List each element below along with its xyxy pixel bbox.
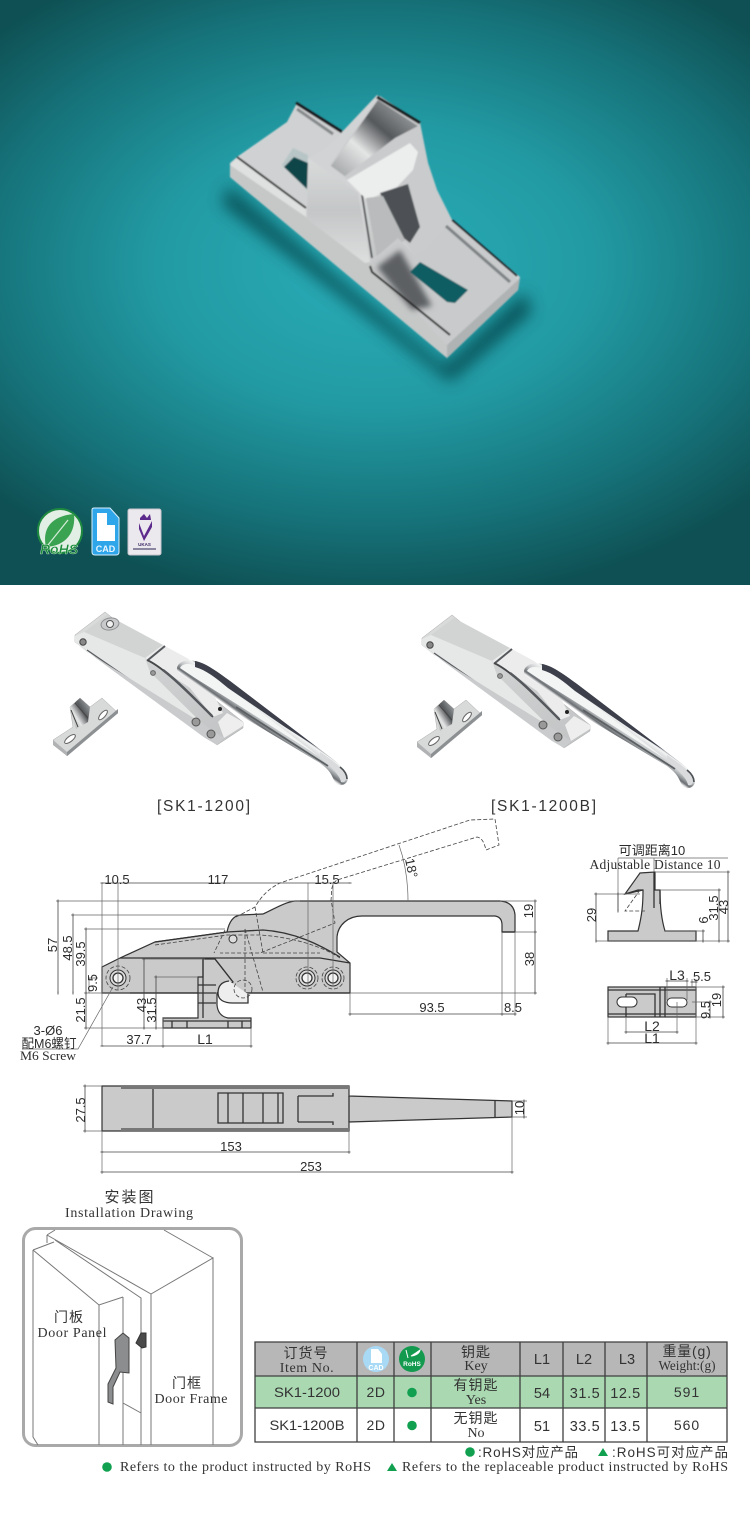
table header: L3 (619, 1352, 635, 1368)
head and neck (330, 96, 452, 255)
technical drawing: top view (73, 1086, 527, 1174)
open position dashed handle (214, 819, 499, 994)
technical drawing: catch side view: 6 (696, 916, 711, 924)
dimension numbers: L1 (197, 1031, 213, 1047)
label: door frame: 门框 (172, 1375, 202, 1391)
table header (280, 1343, 716, 1376)
heading: installation drawing (65, 1189, 193, 1221)
label: door panel: 门板 (54, 1309, 84, 1325)
installation diagram panel (24, 1228, 242, 1446)
table row: SK1-1200B: SK1-1200B (270, 1417, 344, 1433)
technical drawing: catch plan view: L1 (644, 1030, 660, 1046)
technical drawing: top view: 27.5 (73, 1097, 88, 1123)
label: door frame (154, 1375, 228, 1407)
specification table (255, 1342, 727, 1442)
product photo: SK1-1200 (75, 612, 348, 785)
technical drawing: catch side view: 43 (716, 900, 731, 914)
table header: 订货号 (284, 1345, 328, 1361)
certification icons (38, 508, 161, 557)
table header: L2 (576, 1352, 592, 1368)
front side face (230, 165, 447, 358)
table row: SK1-1200: 54 (534, 1386, 550, 1402)
table row: SK1-1200: 591 (674, 1384, 700, 1400)
dimension numbers: 18° (402, 857, 421, 879)
adjustable distance note (590, 843, 721, 872)
screw callout: 3-Ø6 (34, 1023, 62, 1038)
table header: L1 (534, 1352, 550, 1368)
technical drawing: catch plan view: L2 (644, 1018, 660, 1034)
product label: [SK1-1200B] (491, 798, 596, 815)
table row: SK1-1200B: 51 (534, 1419, 550, 1435)
table row: SK1-1200: Yes (466, 1393, 486, 1408)
technical drawing: catch plan view: 5.5 (693, 969, 711, 984)
technical drawing: catch side view (584, 843, 731, 941)
dimension numbers: 10.5 (104, 872, 130, 887)
dimension numbers: 31.5 (144, 997, 159, 1023)
dimension numbers: 19 (521, 904, 536, 918)
right base plate (370, 222, 518, 345)
product label: [SK1-1200] (157, 798, 250, 815)
technical drawing: top view: 153 (220, 1139, 242, 1154)
icon: UKAS mark: UKAS (138, 542, 151, 547)
table header: Weight:(g) (658, 1358, 716, 1373)
technical drawing: side view (20, 819, 537, 1063)
technical drawing: catch plan view: L3 (669, 967, 685, 983)
dimension numbers: 39.5 (73, 941, 88, 967)
dimension numbers (45, 857, 537, 1047)
left base plate (237, 104, 342, 217)
icon: RoHS: RoHS (403, 1361, 422, 1368)
legend: chinese: :RoHS对应产品 (478, 1444, 578, 1460)
heading: installation drawing: 安装图 (104, 1189, 156, 1206)
icon: CAD (363, 1346, 389, 1372)
icon: latch on door (108, 1333, 129, 1404)
table header: Key (464, 1359, 488, 1374)
dimension lines (56, 845, 537, 1048)
icon: RoHS (399, 1346, 425, 1372)
legend: chinese (465, 1444, 728, 1460)
table row: SK1-1200B: No (467, 1426, 485, 1441)
screw callout: M6 Screw (20, 1048, 77, 1063)
product photo: SK1-1200 catch (53, 698, 118, 756)
table header: Item No. (280, 1361, 334, 1376)
label: door panel: Door Panel (38, 1326, 107, 1341)
icon: CAD: CAD (368, 1365, 384, 1372)
legend: english: Refers to the replaceable product instructed by RoHS (402, 1460, 728, 1475)
product photo: SK1-1200B (422, 615, 695, 788)
legend: english: Refers to the product instructed by RoHS (120, 1460, 371, 1475)
label: door frame: Door Frame (154, 1392, 228, 1407)
key lock (100, 617, 120, 631)
technical drawing: top view: 253 (300, 1159, 322, 1174)
dimension numbers: 38 (522, 952, 537, 966)
screw callout (20, 987, 113, 1063)
table header: 钥匙 (461, 1344, 491, 1360)
technical drawing: catch side view: 31.5 (706, 895, 721, 921)
dimension numbers: 8.5 (504, 1000, 522, 1015)
dimension numbers: 93.5 (419, 1000, 445, 1015)
dimension numbers: 117 (208, 872, 228, 887)
screws (106, 966, 344, 990)
table row: SK1-1200B: 2D (367, 1417, 385, 1433)
table row: SK1-1200: SK1-1200 (274, 1384, 340, 1400)
dimension numbers: 57 (45, 938, 60, 952)
dimension numbers: 37.7 (126, 1032, 152, 1047)
icon: CAD file: CAD (96, 544, 116, 554)
tall post face (307, 158, 370, 263)
table row: SK1-1200B: 无钥匙 (454, 1410, 498, 1426)
technical drawing: top view: 10 (512, 1101, 527, 1115)
icon: RoHS leaf badge: RoHS (40, 541, 79, 557)
dimension numbers: 43 (134, 998, 149, 1012)
table row: SK1-1200: 有钥匙 (454, 1377, 498, 1393)
catch section (163, 959, 252, 1028)
technical drawing: catch side view: 29 (584, 908, 599, 922)
table row: SK1-1200: 12.5 (610, 1386, 641, 1402)
adjustable distance note: 可调距离10 (619, 843, 685, 858)
dimension numbers: 9.5 (85, 974, 100, 992)
table row: SK1-1200: 31.5 (570, 1386, 600, 1402)
table row: SK1-1200: 2D (367, 1384, 385, 1400)
icon: catch on frame (136, 1333, 146, 1348)
technical drawing: catch plan view: 9.5 (698, 1001, 713, 1019)
dimension numbers: 15.5 (314, 872, 340, 887)
hero product: chrome strike plate (222, 95, 532, 382)
handle and body outline (102, 901, 515, 993)
table header: 重量(g) (662, 1343, 712, 1359)
table row: SK1-1200B: 13.5 (610, 1419, 641, 1435)
product photo: SK1-1200B catch (417, 700, 482, 758)
table row: SK1-1200B: 560 (674, 1417, 700, 1433)
legend: chinese: :RoHS可对应产品 (612, 1444, 728, 1460)
label: door panel (38, 1309, 107, 1341)
table row: SK1-1200B (270, 1410, 700, 1441)
legend: english (102, 1460, 728, 1475)
adjustable distance note: Adjustable Distance 10 (590, 857, 721, 872)
dimension numbers: 48.5 (60, 935, 75, 961)
table row: SK1-1200B: 33.5 (570, 1419, 600, 1435)
technical drawing: catch plan view: 19 (709, 993, 724, 1007)
table row: SK1-1200 (274, 1377, 700, 1408)
heading: installation drawing: Installation Drawing (65, 1206, 193, 1221)
screw callout: 配M6螺钉 (22, 1036, 76, 1051)
dimension numbers: 21.5 (73, 997, 88, 1023)
hero background (0, 0, 750, 585)
technical drawing: catch plan view (608, 967, 725, 1046)
